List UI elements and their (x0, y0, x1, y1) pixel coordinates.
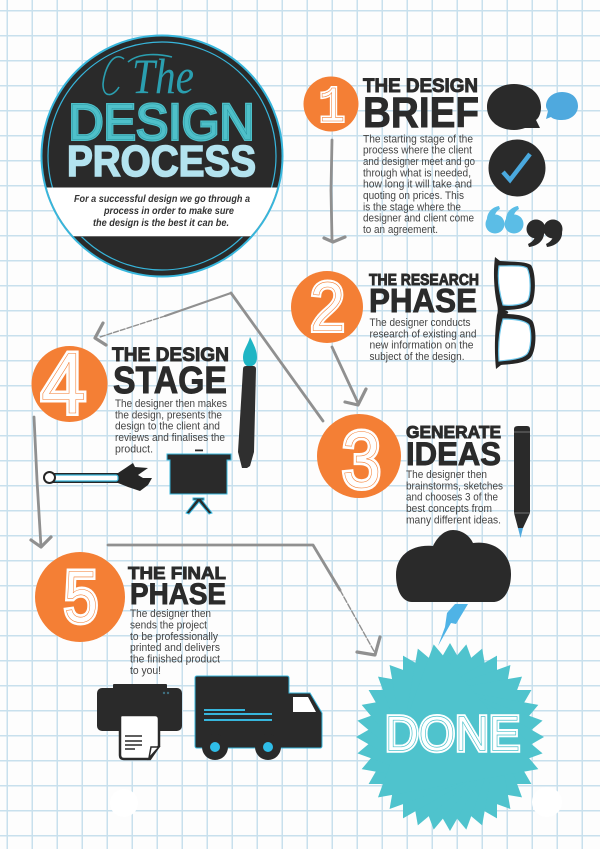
body text: research of existing and (370, 328, 476, 340)
body text: subject of the design. (370, 351, 464, 363)
body text: process where the client (363, 145, 472, 157)
body text: the finished product (130, 654, 220, 666)
body text: designer and client come (363, 213, 474, 225)
body text (363, 133, 475, 236)
number 2 badge: 2 (310, 268, 345, 346)
body text: best concepts from (406, 503, 492, 515)
body text: and designer meet and go (363, 156, 475, 168)
arrow: step 2 to step 3 (332, 347, 366, 405)
title: PROCESS: PROCESS (67, 138, 256, 186)
heading: the research phase: THE RESEARCH (369, 272, 479, 289)
heading: generate ideas: IDEAS (406, 436, 501, 472)
number 4 badge (32, 336, 108, 432)
icon: quotation marks (486, 206, 562, 247)
heading: the final phase: PHASE (130, 578, 226, 611)
number 3 badge: 3 (342, 415, 381, 504)
icon: wrench (44, 463, 152, 491)
body text: to you! (130, 665, 161, 677)
body text: The designer then (130, 608, 211, 620)
heading: the design stage (112, 344, 229, 402)
body text: sends the project (130, 619, 207, 631)
intro text: For a successful design we go through a (74, 193, 250, 205)
arrow: step 1 to step 2 (324, 140, 345, 242)
icon: delivery truck (195, 676, 322, 760)
done badge (356, 613, 574, 846)
body text: product. (115, 443, 153, 455)
arrow: step 3 to step 4 (95, 293, 323, 421)
body text: printed and delivers (130, 642, 221, 654)
body text: new information on the (370, 340, 474, 352)
step 3 panel (317, 414, 530, 646)
body text: reviews and finalises the (115, 432, 225, 444)
body text: the design, presents the (115, 409, 222, 421)
heading: generate ideas: GENERATE (406, 422, 501, 442)
step 4 panel (32, 336, 257, 514)
icon: presentation board (167, 450, 231, 514)
number 1 badge: 1 (319, 80, 345, 137)
icon: check mark (488, 140, 546, 196)
punched paper holes (110, 787, 562, 817)
body text (115, 398, 228, 455)
intro band (46, 188, 278, 237)
heading: the design brief: BRIEF (363, 89, 479, 137)
title: The (103, 48, 194, 104)
body text: quoting on prices. This (363, 190, 465, 202)
DONE lettering: DONE (385, 708, 520, 762)
title badge (30, 34, 300, 278)
number 5 badge: 5 (64, 557, 98, 638)
heading: the final phase: THE FINAL (128, 563, 226, 583)
heading: the design brief: THE DESIGN (363, 76, 478, 97)
body text: The designer then makes (115, 398, 228, 410)
body text: is the stage where the (363, 201, 461, 213)
body text: brainstorms, sketches (406, 480, 504, 492)
body text: The starting stage of the (363, 133, 473, 145)
body text: how long it will take and (363, 179, 472, 191)
body text: design to the client and (115, 421, 220, 433)
title: DESIGN: DESIGN (68, 94, 254, 150)
heading: the design stage: THE DESIGN (112, 344, 229, 366)
number 1 badge (304, 76, 358, 137)
body text: many different ideas. (406, 514, 501, 526)
icon: lightning bolt (438, 604, 468, 646)
step 1 panel (304, 76, 578, 247)
number 3 badge (317, 414, 401, 504)
icon: cloud (396, 530, 511, 602)
body text: to an agreement. (363, 224, 438, 236)
heading: the final phase (128, 563, 226, 611)
number 2 badge: 2 (310, 268, 345, 346)
number 4 badge: 4 (41, 336, 86, 432)
number 1 badge: 1 (319, 80, 345, 137)
body text: The designer conducts (370, 317, 471, 329)
number 5 badge (35, 552, 125, 642)
body text (130, 608, 221, 677)
body text (370, 317, 476, 363)
body text: through what is needed, (363, 167, 471, 179)
icon: pencil (514, 426, 530, 538)
heading: the research phase: PHASE (369, 282, 477, 319)
step 2 panel (291, 257, 535, 369)
icon: printer (97, 684, 182, 759)
body text (406, 469, 504, 526)
title: DESIGN: DESIGN (68, 94, 254, 150)
body text: to be professionally (130, 631, 219, 643)
body text: The designer then (406, 469, 487, 481)
body text: and chooses 3 of the (406, 492, 498, 504)
DONE lettering: DONE (385, 708, 520, 762)
intro text (74, 193, 250, 229)
title: The: The (132, 48, 194, 104)
icon: glasses (494, 257, 535, 369)
number 2 badge (291, 268, 363, 346)
number 5 badge: 5 (64, 557, 98, 638)
step 5 panel (35, 552, 322, 760)
icon: paint brush (238, 337, 257, 468)
arrow: step 4 to step 5 (31, 417, 51, 547)
icon: speech bubbles (487, 84, 578, 130)
arrow: step 5 to done (108, 545, 380, 655)
number 4 badge: 4 (41, 336, 86, 432)
heading: the design stage: STAGE (113, 360, 227, 402)
number 3 badge: 3 (342, 415, 381, 504)
intro text: process in order to make sure (103, 205, 234, 217)
intro text: the design is the best it can be. (93, 217, 229, 229)
starburst (356, 613, 574, 846)
